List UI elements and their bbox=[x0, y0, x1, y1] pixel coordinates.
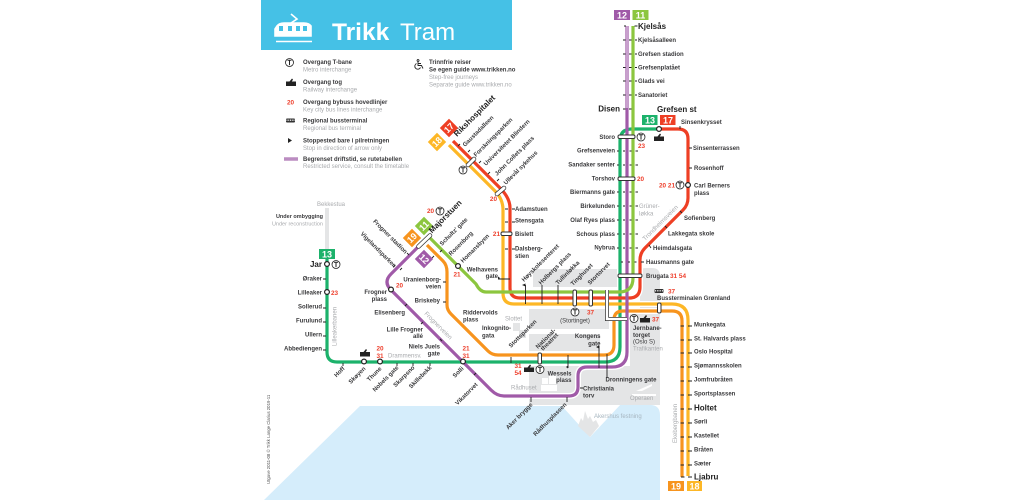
legend: bus interchange: Overgang bybuss hovedlinjer bbox=[303, 100, 388, 106]
stations: Sinsen to Grønland: Sofienberg bbox=[684, 216, 716, 222]
stations: Storo to Nybrua: Biermanns gate bbox=[570, 190, 616, 196]
stations: Storo to Nybrua: Olaf Ryes plass bbox=[570, 218, 616, 224]
stations: city centre: 31 bbox=[514, 363, 522, 370]
stations: city centre: Christiania bbox=[583, 386, 615, 392]
stations: city centre: (Stortinget) bbox=[560, 318, 590, 324]
Akershus festning landmark bbox=[561, 405, 642, 437]
rotated stations: west: Skøyen bbox=[348, 366, 368, 386]
stations: Storo to Nybrua: Schous plass bbox=[576, 232, 616, 238]
line 13 green bbox=[327, 129, 659, 362]
stations: city centre: (Oslo S) bbox=[633, 340, 655, 346]
stations: city centre: Slottet bbox=[505, 316, 522, 322]
stations: Sinsen to Grønland: plass bbox=[694, 191, 710, 197]
stations: city centre: 20 bbox=[490, 196, 497, 203]
stations: Sinsen to Grønland: Bussterminalen Grønland bbox=[657, 296, 731, 302]
stations: city centre: Welhavens bbox=[467, 268, 499, 274]
stations: Storo to Nybrua: løkka bbox=[639, 212, 654, 218]
stations: city centre: Rådhuset bbox=[511, 384, 537, 392]
stations: Storo to Nybrua: Grefsenveien bbox=[577, 148, 615, 154]
stations: Ekeberg line: Oslo Hospital bbox=[694, 350, 733, 356]
legend: stop in one direction: Stop in direction of arrow only bbox=[303, 146, 382, 152]
badge 17 Rikshospitalet bbox=[440, 119, 458, 137]
stations: Sinsen to Grønland: 20 21 bbox=[659, 182, 675, 190]
stations: Kjelsås branch: Kjelsåsalleen bbox=[638, 37, 676, 44]
legend: stop in one direction bbox=[288, 138, 390, 152]
rotated stations: centre: National- bbox=[535, 328, 558, 350]
stations: city centre: Operaen bbox=[630, 396, 653, 402]
stations: city centre: gate bbox=[486, 274, 499, 280]
water: Oslofjord bbox=[264, 405, 660, 500]
stations: city centre: torget bbox=[633, 333, 650, 339]
line 19 orange bbox=[427, 245, 682, 477]
stations: Jar to Abbediengen: Niels Juels bbox=[409, 344, 441, 350]
rotated stations: centre: Aker brygge bbox=[505, 402, 535, 431]
stations: Frogner area: Frogner bbox=[364, 290, 388, 296]
stations: Ekeberg line bbox=[673, 322, 746, 482]
badge 11 top: 11 bbox=[636, 10, 645, 20]
legend: bus interchange: Key city bus lines interchange bbox=[303, 108, 383, 114]
stations: Jar to Abbediengen: Abbediengen bbox=[284, 346, 322, 352]
stations: Sinsen to Grønland: 31 54 bbox=[670, 273, 686, 280]
badge 11 Majorstuen bbox=[415, 217, 433, 235]
stations: Frogner area: Lille Frogner bbox=[387, 328, 424, 334]
rotated stations: west: Frogner stadion bbox=[371, 219, 408, 256]
legend: step-free: Se egen guide www.trikken.no bbox=[429, 68, 516, 74]
legend: regional bus terminal: Regional bussterminal bbox=[303, 118, 368, 124]
stations: Majorstuen and Rikshospitalet branches: Majorstuen bbox=[427, 198, 464, 235]
rotated stations: centre: theatret bbox=[540, 333, 560, 352]
rotated stations: centre: Tullinløkka bbox=[555, 260, 582, 286]
rotated stations: centre: Stortorvet bbox=[587, 262, 612, 286]
stations: city centre: gata bbox=[482, 334, 495, 340]
stations: city centre bbox=[453, 196, 663, 402]
badge 12 top: 12 bbox=[617, 10, 627, 20]
stations: Jar to Abbediengen: gate bbox=[428, 352, 441, 358]
stations: Storo to Nybrua: Grüner- bbox=[639, 204, 660, 210]
stations: Jar to Abbediengen: Lilleakerbanen bbox=[332, 307, 338, 346]
stations: Frogner area: Uranienborg- bbox=[403, 278, 441, 284]
stations: city centre: Inkognito- bbox=[482, 326, 511, 332]
stations: Jar to Abbediengen: 20 bbox=[376, 346, 384, 352]
white casing for tram lines bbox=[327, 26, 688, 477]
stations: Kjelsås branch bbox=[598, 22, 697, 114]
stations: city centre: 54 bbox=[514, 370, 522, 377]
legend: bus interchange: 20 bbox=[287, 100, 295, 106]
stations: Kjelsås branch: Glads vei bbox=[638, 79, 665, 85]
stations: Frogner area: allé bbox=[413, 334, 424, 340]
line badges bbox=[319, 10, 702, 492]
stations: Majorstuen and Rikshospitalet branches: Forskningsparken bbox=[473, 117, 514, 158]
line 12 purple bbox=[387, 26, 627, 396]
header banner bbox=[261, 0, 512, 50]
line under reconstruction to Bekkestua: Under reconstruction bbox=[272, 222, 323, 228]
line under reconstruction to Bekkestua: Bekkestua bbox=[317, 202, 346, 208]
rotated stations: west: Thune bbox=[366, 366, 384, 383]
rotated stations: centre: Holbergs plass bbox=[538, 251, 573, 286]
stations: city centre: stien bbox=[515, 254, 529, 260]
badge 18 Rikshospitalet bbox=[428, 133, 446, 151]
stations: Majorstuen and Rikshospitalet branches: Universitetet Blindern bbox=[483, 119, 532, 167]
stations: Jar to Abbediengen: 23 bbox=[331, 290, 339, 297]
legend: restricted service: Restricted service, consult the timetable bbox=[303, 164, 410, 170]
badge 11 top bbox=[632, 10, 648, 20]
stations: Sinsen to Grønland: Sinsenterrassen bbox=[693, 146, 740, 152]
stations: Majorstuen and Rikshospitalet branches bbox=[427, 93, 540, 264]
stations: Ekeberg line: Ekebergbanen bbox=[673, 404, 679, 443]
stations: Kjelsås branch: Grefsen st bbox=[657, 105, 697, 114]
stations: Kjelsås branch: Sanatoriet bbox=[638, 93, 667, 99]
stations: city centre: plass bbox=[463, 318, 479, 324]
legend: metro interchange bbox=[286, 58, 353, 74]
stations: Ekeberg line: Jomfrubråten bbox=[694, 376, 733, 384]
railway icons bbox=[360, 134, 664, 372]
badge 17 Rikshospitalet: 17 bbox=[442, 121, 456, 135]
line 11 light green bbox=[430, 26, 633, 292]
stations: Jar to Abbediengen: Øraker bbox=[303, 276, 323, 282]
header banner: Tram bbox=[400, 19, 455, 46]
rotated stations: west: Vikatorvet bbox=[455, 382, 479, 407]
legend: stop in one direction: Stoppested bare i pilretningen bbox=[303, 138, 390, 144]
stations: Jar to Abbediengen: Lilleaker bbox=[298, 290, 323, 296]
legend: restricted service: Begrenset driftstid, se rutetabellen bbox=[303, 157, 402, 163]
stations: Majorstuen and Rikshospitalet branches: John Collets plass bbox=[494, 135, 536, 177]
stations: city centre: Dalsberg- bbox=[515, 246, 543, 252]
legend: railway interchange: Overgang tog bbox=[303, 80, 342, 86]
stations: Majorstuen and Rikshospitalet branches: Homansbyen bbox=[460, 233, 491, 264]
edition credit: Utgave 2011-08 © Trikk Lange Clarius 2019-11 bbox=[266, 394, 271, 484]
stations: Sinsen to Grønland: Trondheimsveien bbox=[641, 204, 680, 242]
stations: Majorstuen and Rikshospitalet branches: Rikshospitalet bbox=[452, 93, 497, 138]
stations: city centre: Bislett bbox=[515, 232, 533, 238]
legend: metro interchange: Metro interchange bbox=[303, 68, 352, 74]
stations: Jar to Abbediengen: Jar bbox=[310, 260, 322, 269]
rotated stations: centre bbox=[505, 244, 612, 438]
stations: Ekeberg line: Holtet bbox=[694, 404, 717, 412]
rotated stations: centre: Høyskolesenteret bbox=[521, 244, 561, 283]
stations: Majorstuen and Rikshospitalet branches: Ullevål sykehus bbox=[502, 149, 540, 186]
stations: Ekeberg line: St. Halvards plass bbox=[694, 336, 746, 342]
stations: Jar to Abbediengen: 31 bbox=[462, 353, 470, 360]
city landmarks: Rådhuset, Operaen bbox=[541, 376, 656, 396]
stations: Jar to Abbediengen: Sollerud bbox=[298, 304, 322, 310]
stations: Sinsen to Grønland: Hausmanns gate bbox=[646, 260, 695, 266]
badge 11 Majorstuen: 11 bbox=[417, 219, 431, 233]
legend bbox=[284, 58, 516, 170]
stations: Sinsen to Grønland: 37 bbox=[668, 288, 676, 296]
badge 12 Majorstuen bbox=[415, 250, 433, 268]
legend: step-free: Trinnfrie reiser bbox=[429, 60, 472, 66]
legend: step-free: Separate guide www.trikken.no bbox=[429, 82, 512, 88]
stations: Majorstuen and Rikshospitalet branches: Gaustadalleen bbox=[462, 115, 496, 148]
stations: Sinsen to Grønland: Heimdalsgata bbox=[653, 246, 693, 252]
stations: Storo to Nybrua: Nybrua bbox=[594, 246, 616, 252]
rotated stations: west: Skillebekk bbox=[408, 365, 434, 390]
stations: Ekeberg line: Sjømannsskolen bbox=[694, 364, 742, 370]
rotated stations: west: Skarpsno bbox=[393, 365, 417, 389]
rotated stations: centre: Rådhusplassen bbox=[532, 401, 569, 438]
stations: city centre: 21 bbox=[453, 272, 461, 278]
stations: city centre: plass bbox=[556, 378, 572, 384]
stations: Majorstuen and Rikshospitalet branches: Schultz' gate bbox=[439, 217, 470, 247]
badge 12 Majorstuen: 12 bbox=[417, 252, 431, 266]
icon: tram bbox=[275, 14, 312, 42]
stations: Storo to Nybrua: Sandaker senter bbox=[568, 162, 616, 168]
rotated stations: west: Vigelandsparken bbox=[359, 231, 397, 270]
stations: Storo to Nybrua: Storo bbox=[599, 135, 615, 141]
stations: Sinsen to Grønland bbox=[641, 120, 740, 302]
badge 13 Jar: 13 bbox=[322, 250, 332, 260]
line 18 yellow bbox=[449, 145, 688, 476]
legend: step-free: Step-free journeys bbox=[429, 75, 478, 81]
title: Trikk bbox=[332, 19, 390, 46]
stations: Ekeberg line: Sæter bbox=[694, 462, 712, 468]
stations: city centre: Stensgata bbox=[515, 218, 544, 224]
rotated stations: centre: Tinghuset bbox=[570, 263, 595, 287]
stations: Storo to Nybrua: 23 bbox=[638, 143, 646, 150]
stations: Frogner area: Elisenberg bbox=[374, 310, 405, 316]
stations: Frogner area: Briskeby bbox=[415, 298, 441, 304]
badge 18 Ljabru: 18 bbox=[689, 482, 700, 492]
stations: Frogner area: 20 bbox=[427, 208, 435, 215]
line under reconstruction to Bekkestua bbox=[272, 202, 346, 250]
rotated stations: west: Hoff bbox=[334, 365, 347, 379]
stations: Storo to Nybrua: Torshov bbox=[592, 176, 616, 182]
badge 19 Ljabru bbox=[668, 481, 684, 492]
rotated stations: west: Solli bbox=[452, 366, 466, 379]
badge 19 Majorstuen: 19 bbox=[405, 231, 419, 245]
stations: city centre: Wessels bbox=[548, 372, 572, 378]
interchange pills bbox=[418, 135, 661, 364]
stations: Ekeberg line: Sportsplassen bbox=[694, 392, 736, 398]
stations: Majorstuen and Rikshospitalet branches: Rosenborg bbox=[448, 231, 475, 257]
stations: Frogner area: 20 bbox=[396, 282, 404, 290]
stop ticks bbox=[323, 26, 692, 477]
stations: Storo to Nybrua: Birkelunden bbox=[580, 204, 615, 210]
icon: Slottet building bbox=[513, 323, 526, 338]
badge 17 Grefsen: 17 bbox=[663, 116, 673, 126]
legend: bus interchange bbox=[287, 100, 388, 114]
legend: restricted service bbox=[284, 157, 410, 170]
stations: city centre: Adamstuen bbox=[515, 207, 548, 213]
stations: city centre: gate bbox=[588, 342, 601, 348]
rotated stations: west: Frognerveien bbox=[423, 310, 454, 342]
stations: city centre: Dronningens gate bbox=[606, 378, 657, 384]
stations: Jar to Abbediengen bbox=[284, 260, 470, 360]
stations: Jar to Abbediengen: Ullern bbox=[305, 332, 322, 338]
stations: Ekeberg line: Munkegata bbox=[694, 322, 726, 328]
stations: Sinsen to Grønland: Brugata bbox=[646, 274, 669, 280]
badge 18 Rikshospitalet: 18 bbox=[430, 135, 444, 149]
stations: Kjelsås branch: Kjelsås bbox=[638, 22, 667, 31]
stations: city centre: Riddervolds bbox=[463, 310, 498, 316]
station circles bbox=[325, 127, 690, 364]
rotated stations: west bbox=[334, 219, 479, 407]
badge 12 top bbox=[614, 10, 630, 20]
stations: Frogner area: plass bbox=[372, 297, 388, 303]
stations: Kjelsås branch: Disen bbox=[598, 104, 620, 114]
stations: Ekeberg line: Ljabru bbox=[694, 472, 719, 482]
stations: Frogner area bbox=[364, 208, 441, 340]
stations: Sinsen to Grønland: Rosenhoff bbox=[694, 166, 725, 172]
stations: city centre: Trafikanten bbox=[633, 346, 663, 352]
badge 19 Majorstuen bbox=[403, 229, 421, 247]
bus terminal icon bbox=[654, 289, 664, 293]
stations: Ekeberg line: Kastellet bbox=[694, 434, 719, 440]
direction arrows bbox=[498, 276, 599, 368]
stations: Jar to Abbediengen: 31 bbox=[376, 353, 384, 360]
stations: Jar to Abbediengen: Drammensv. bbox=[388, 354, 422, 360]
city centre land blocks bbox=[529, 268, 660, 405]
legend: metro interchange: Overgang T-bane bbox=[303, 60, 353, 66]
stations: Storo to Nybrua bbox=[568, 135, 660, 252]
badge 13 Grefsen: 13 bbox=[645, 116, 655, 126]
stations: city centre: 37 bbox=[652, 316, 660, 324]
legend: regional bus terminal bbox=[286, 118, 368, 132]
stations: Storo to Nybrua: 20 bbox=[637, 176, 645, 183]
stations: Kjelsås branch: Grefsenplatået bbox=[638, 64, 680, 72]
stations: Jar to Abbediengen: Furulund bbox=[296, 318, 322, 324]
metro interchange icons bbox=[332, 133, 684, 374]
stations: city centre: Jernbane- bbox=[633, 326, 662, 332]
legend: railway interchange bbox=[286, 78, 358, 94]
rotated stations: centre: Stottsparken bbox=[508, 319, 539, 349]
badge 13 Jar bbox=[319, 249, 335, 260]
badge 18 Ljabru bbox=[687, 481, 702, 492]
line under reconstruction to Bekkestua: Under ombygging bbox=[276, 214, 323, 220]
badge 19 Ljabru: 19 bbox=[671, 482, 681, 492]
stations: Ekeberg line: Sørli bbox=[694, 420, 708, 426]
stations: city centre: 21 bbox=[493, 231, 500, 238]
badge 13 Grefsen bbox=[642, 115, 658, 126]
rotated stations: west: Nobels gate bbox=[372, 365, 401, 393]
stations: city centre: torv bbox=[583, 394, 595, 400]
stations: city centre: 37 bbox=[587, 310, 595, 316]
stations: Jar to Abbediengen: 21 bbox=[462, 346, 470, 352]
line 12 restricted section bbox=[626, 26, 628, 108]
stations: Sinsen to Grønland: Sinsenkrysset bbox=[681, 120, 722, 126]
stations: Kjelsås branch: Grefsen stadion bbox=[638, 52, 684, 58]
stations: Sinsen to Grønland: Lakkegata skole bbox=[668, 232, 715, 238]
Akershus festning landmark: Akershus festning bbox=[594, 414, 642, 420]
line 17 red bbox=[453, 129, 688, 298]
stations: Sinsen to Grønland: Carl Berners bbox=[694, 184, 731, 190]
stations: Frogner area: veien bbox=[426, 284, 441, 290]
legend: step-free bbox=[415, 60, 516, 88]
legend: regional bus terminal: Regional bus terminal bbox=[303, 126, 361, 132]
stations: city centre: Kongens bbox=[575, 334, 601, 340]
badge 17 Grefsen bbox=[660, 115, 676, 126]
legend: railway interchange: Railway interchange bbox=[303, 88, 358, 94]
stations: Ekeberg line: Bråten bbox=[694, 446, 713, 454]
